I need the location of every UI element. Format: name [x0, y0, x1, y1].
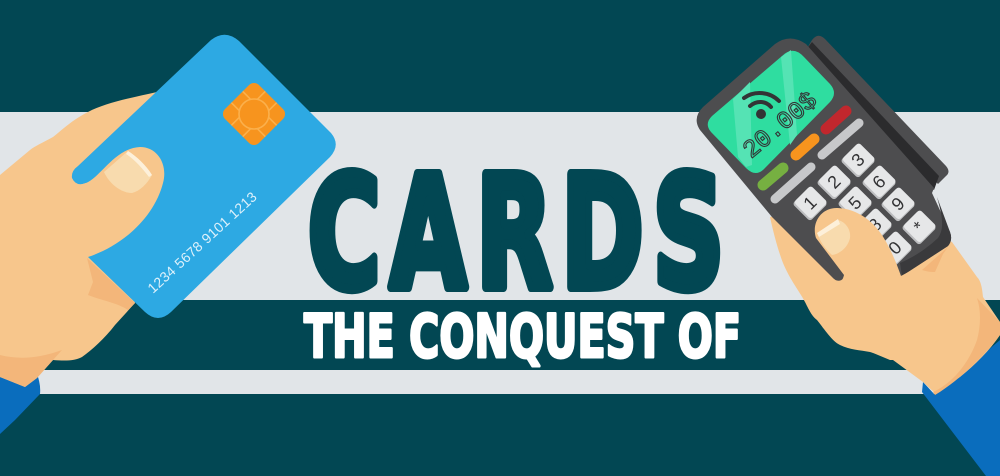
orange button: [796, 139, 814, 155]
icon: right hand holding payment terminal: [697, 36, 1000, 476]
keypad: 5: [844, 192, 866, 214]
card number: 1234 5678 9101 1213: [144, 188, 260, 296]
title: CARDS: CARDS: [308, 143, 724, 324]
keypad: 2: [823, 171, 845, 193]
wifi icon: [744, 93, 779, 119]
keypad: 6: [868, 171, 890, 193]
right wrist shade: [933, 298, 1000, 395]
left thumb nail: [104, 151, 152, 193]
green button: [763, 168, 783, 185]
red button: [826, 111, 846, 129]
keypad: 3: [847, 149, 869, 171]
keypad: 9: [887, 193, 909, 215]
right nail highlight: [817, 219, 840, 237]
terminal screen: [708, 51, 834, 173]
keypad: 0: [884, 237, 906, 259]
icon: left hand holding credit card: [0, 35, 336, 434]
palm fold shade: [87, 258, 135, 310]
left sleeve: [0, 374, 40, 434]
terminal body: [697, 38, 951, 300]
right hand back: [770, 200, 1000, 393]
grey button right: [822, 123, 859, 155]
nail highlight: [126, 151, 152, 177]
left hand back: [0, 92, 157, 387]
right thumb and palm: [815, 208, 960, 360]
credit card: [72, 35, 336, 318]
keypad: 8: [864, 214, 886, 236]
grey button left: [775, 167, 811, 199]
right sleeve: [922, 340, 1000, 476]
screen glare: [733, 50, 797, 167]
keypad: *: [909, 217, 929, 237]
keypad: [792, 142, 937, 266]
left thumb: [30, 147, 164, 275]
left hand wrist shade: [0, 350, 62, 387]
terminal lower shade: [900, 197, 951, 276]
card reader slot: [806, 36, 948, 190]
right thumb nail: [817, 220, 850, 255]
card chip: [220, 80, 288, 148]
keypad: 1: [799, 192, 821, 214]
subtitle: THE CONQUEST OF: THE CONQUEST OF: [304, 302, 741, 372]
palm fold shade right: [922, 247, 948, 272]
screen amount: 20.00$: [738, 86, 824, 165]
